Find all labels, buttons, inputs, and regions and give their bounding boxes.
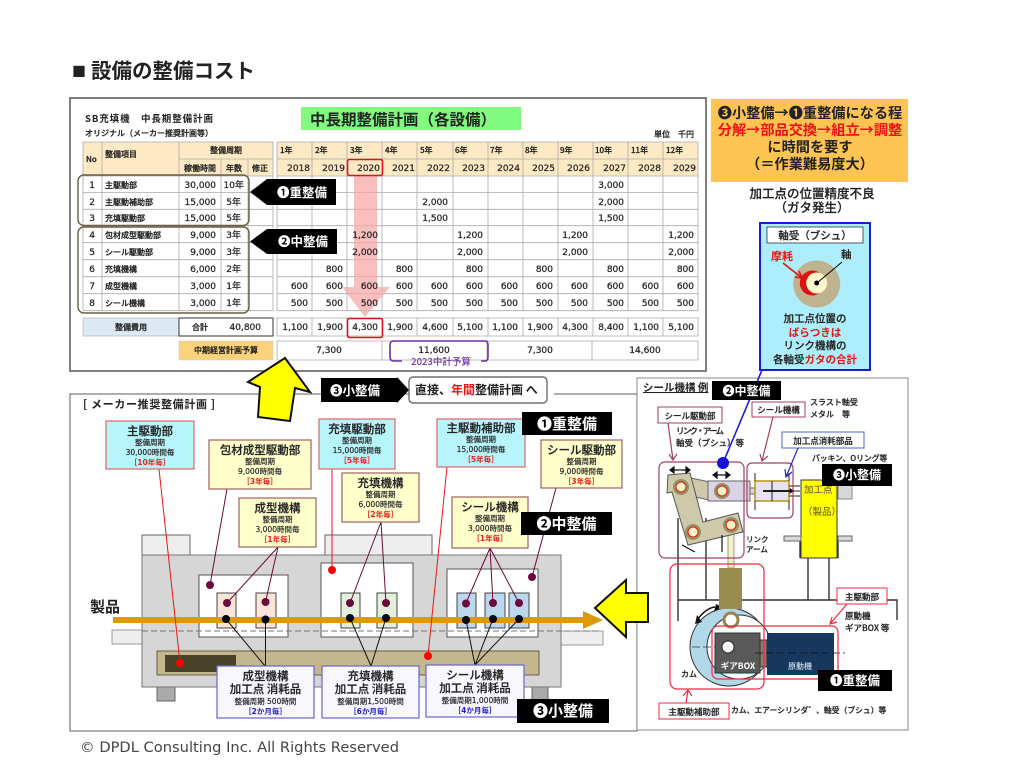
row labels: 主駆動補助部 xyxy=(105,197,153,208)
maintenance cost row: 8,400 xyxy=(598,323,624,333)
accuracy heading: （ガタ発生） xyxy=(774,197,850,216)
yearly cost values: 600 xyxy=(361,282,378,292)
yearly cost values: 800 xyxy=(326,265,343,275)
seal cylinder xyxy=(755,473,800,510)
yellow arrow up xyxy=(248,358,310,421)
table header: 整備周期 xyxy=(210,145,242,156)
label small maintenance xyxy=(822,464,892,486)
callout: packaging forming drive xyxy=(209,440,311,489)
maintenance cost row: 1,100 xyxy=(282,323,308,333)
table header: 12年 xyxy=(666,145,683,156)
table header: 修正 xyxy=(252,163,268,174)
yearly cost values: 1,200 xyxy=(668,231,694,241)
row labels: 1年 xyxy=(226,280,241,292)
label small maintenance: ❸小整備 xyxy=(833,466,881,483)
table header: 年数 xyxy=(226,163,242,174)
table subtitle: オリジナル（メーカー推奨計画等） xyxy=(85,128,213,139)
table header: 11年 xyxy=(631,145,648,156)
yearly cost values: 800 xyxy=(607,265,624,275)
yearly cost values: 3,000 xyxy=(598,181,624,191)
callout: main drive: 整備周期 xyxy=(135,437,165,447)
table header: 2020 xyxy=(357,164,380,174)
yearly cost values: 1,200 xyxy=(457,231,483,241)
row labels: シール機構 xyxy=(105,298,145,309)
row labels: 15,000 xyxy=(184,214,216,224)
yearly cost values: 2,000 xyxy=(562,248,588,258)
consumables box: filling: 加工点 消耗品 xyxy=(335,681,406,697)
row labels: 主駆動部 xyxy=(105,180,137,191)
label small maintenance to annual plan: ❸小整備 xyxy=(330,380,381,399)
yearly cost values: 2,000 xyxy=(598,198,624,208)
tag: main drive auxiliary: 主駆動補助部 xyxy=(668,706,720,718)
arrow label medium maintenance: ❷中整備 xyxy=(278,231,328,250)
footer copyright: © DPDL Consulting Inc. All Rights Reserved xyxy=(80,740,399,756)
text: motor gearbox: ギアBOX 等 xyxy=(845,622,890,634)
callout: seal mechanism: 整備周期 xyxy=(475,513,505,523)
link arm xyxy=(667,473,755,545)
callout: packaging forming drive: 包材成型駆動部 xyxy=(220,442,301,458)
callout: main drive auxiliary: 整備周期 xyxy=(466,434,496,444)
table header xyxy=(83,142,698,176)
purple bracket 2023 budget xyxy=(390,341,488,368)
table header: 2018 xyxy=(287,164,310,174)
yearly cost values: 500 xyxy=(642,299,659,309)
panel: work difficulty note: に時間を要す xyxy=(767,137,853,157)
maintenance points xyxy=(176,566,536,667)
panel: bearing detail: 加工点位置の xyxy=(784,311,846,326)
maintenance cost row: 40,800 xyxy=(230,323,261,333)
table header: 2022 xyxy=(427,164,450,174)
table header: 7年 xyxy=(490,145,503,156)
callout: seal mechanism xyxy=(452,497,528,548)
maintenance cost row: 1,900 xyxy=(387,323,413,333)
panel: work difficulty note: ❸小整備→❶重整備になる程 xyxy=(718,103,902,123)
tag: consumable parts: 加工点消耗部品 xyxy=(793,435,853,447)
yearly cost values: 800 xyxy=(396,265,413,275)
row labels: 30,000 xyxy=(184,181,216,191)
callout: filling drive: 充填駆動部 xyxy=(328,421,386,437)
table header: 整備項目 xyxy=(105,149,137,160)
text: link arm bearing: リンク・アーム xyxy=(676,425,724,437)
table header: 2026 xyxy=(567,164,590,174)
yearly cost values: 500 xyxy=(396,299,413,309)
panel: bearing detail: 軸受（ブシュ） xyxy=(778,228,852,243)
panel: bearing detail: リンク機構の xyxy=(784,338,846,353)
label small maintenance: ❸小整備 xyxy=(533,700,593,721)
row labels: 5 xyxy=(89,248,95,258)
yearly cost values: 600 xyxy=(466,282,483,292)
yearly cost values: 1,500 xyxy=(598,214,624,224)
table header: 稼働時間 xyxy=(184,163,216,174)
row labels: 充填機構 xyxy=(105,264,137,275)
yearly cost values: 600 xyxy=(536,282,553,292)
table header: 1年 xyxy=(280,145,293,156)
consumables box: forming: 加工点 消耗品 xyxy=(230,681,301,697)
table header: 2025 xyxy=(532,164,555,174)
callout: packaging forming drive: ［3年毎］ xyxy=(242,476,278,486)
row labels: 3年 xyxy=(226,246,241,258)
row labels: 9,000 xyxy=(190,231,216,241)
table header: 6年 xyxy=(455,145,468,156)
consumables box: seal xyxy=(426,665,524,717)
callout: seal drive: シール駆動部 xyxy=(547,442,616,458)
consumables box: seal: 加工点 消耗品 xyxy=(439,680,511,696)
group outline main drive xyxy=(712,626,838,679)
maintenance cost row: 4,300 xyxy=(352,323,378,333)
yearly cost values: 1,200 xyxy=(562,231,588,241)
row labels: 1 xyxy=(89,181,95,191)
unit label: 単位 千円 xyxy=(654,129,694,140)
yearly cost values: 500 xyxy=(431,299,448,309)
cam xyxy=(690,604,780,686)
title: 設備の整備コスト xyxy=(91,54,255,84)
row labels xyxy=(89,179,244,309)
consumables box: filling: 整備周期1,500時間 xyxy=(337,696,404,706)
table header: 2024 xyxy=(497,164,520,174)
callout: packaging forming drive: 整備周期 xyxy=(245,456,275,466)
maintenance cost row: 1,900 xyxy=(527,323,553,333)
consumables box: filling: ［6か月毎］ xyxy=(349,706,392,716)
panel: work difficulty note: 分解→部品交換→組立→調整 xyxy=(718,120,902,140)
workpiece: 加工点 xyxy=(804,482,833,496)
callout: main drive: 30,000時間毎 xyxy=(126,447,175,457)
callout: filling mechanism: 6,000時間毎 xyxy=(359,499,403,509)
panel: bearing detail: 軸 xyxy=(841,247,852,262)
arrow label medium maintenance xyxy=(250,229,337,254)
link bushings xyxy=(674,480,738,538)
tag: seal drive xyxy=(658,407,722,423)
yearly cost values: 1,200 xyxy=(352,231,378,241)
yearly cost values: 500 xyxy=(466,299,483,309)
yearly cost values: 1,500 xyxy=(422,214,448,224)
yearly cost values: 2,000 xyxy=(668,248,694,258)
label heavy maintenance xyxy=(522,412,612,435)
tag: seal mechanism xyxy=(752,402,805,417)
callout: seal drive xyxy=(541,440,622,488)
table header: 2021 xyxy=(392,164,415,174)
yearly cost values: 600 xyxy=(396,282,413,292)
callout: filling drive: 整備周期 xyxy=(342,435,372,445)
yearly cost values: 800 xyxy=(466,265,483,275)
callout: main drive: 主駆動部 xyxy=(127,423,173,439)
yearly cost values: 600 xyxy=(291,282,308,292)
label heavy maintenance: ❶重整備 xyxy=(830,670,880,689)
panel: seal mechanism example xyxy=(637,370,908,730)
text: packing: パッキン、Oリング等 xyxy=(812,453,888,464)
blue connector from bearing detail xyxy=(717,370,762,469)
yearly cost values: 2,000 xyxy=(457,248,483,258)
yearly cost values: 2,000 xyxy=(422,198,448,208)
callout: forming mechanism: ［1年毎］ xyxy=(260,534,295,544)
maintenance cost row: 合計 xyxy=(192,322,208,333)
table header: 2019 xyxy=(322,164,345,174)
callout: filling mechanism: ［2年毎］ xyxy=(363,509,398,519)
yearly cost values: 600 xyxy=(571,282,588,292)
row labels: 15,000 xyxy=(184,198,216,208)
yearly cost values: 600 xyxy=(677,282,694,292)
row labels: 1年 xyxy=(226,297,241,309)
yearly cost values: 600 xyxy=(501,282,518,292)
row labels: 充填駆動部 xyxy=(105,213,145,224)
yearly cost values: 500 xyxy=(501,299,518,309)
group outline main drive auxiliary xyxy=(670,564,764,689)
maintenance cost row: 1,100 xyxy=(492,323,518,333)
text: link arm: リンク xyxy=(746,534,768,545)
consumables box: seal: シール機構 xyxy=(446,667,504,683)
maintenance cost row xyxy=(83,318,698,336)
arrow label heavy maintenance: ❶重整備 xyxy=(277,182,327,201)
purple bracket 2023 budget: 2023中計予算 xyxy=(411,354,471,368)
red highlight 2020 xyxy=(348,160,382,176)
maintenance cost row: 4,600 xyxy=(422,323,448,333)
tag: seal mechanism: シール機構 xyxy=(757,404,800,416)
callout: filling mechanism: 整備周期 xyxy=(366,489,396,499)
group outline seal drive xyxy=(659,462,744,558)
row labels: 7 xyxy=(89,282,95,292)
label heavy maintenance: ❶重整備 xyxy=(537,413,597,434)
table header: 4年 xyxy=(385,145,398,156)
callout: seal mechanism: シール機構 xyxy=(461,499,519,515)
callout: main drive auxiliary: 15,000時間毎 xyxy=(457,444,506,454)
yearly cost values: 2,000 xyxy=(352,248,378,258)
callout: seal mechanism: 3,000時間毎 xyxy=(468,523,512,533)
callout: seal drive: 9,000時間毎 xyxy=(560,466,604,476)
table header: 8年 xyxy=(525,145,538,156)
row labels: 3,000 xyxy=(190,299,216,309)
machine illustration xyxy=(112,535,603,701)
green heading: 中長期整備計画（各設備） xyxy=(310,108,496,130)
panel: bearing detail: ばらつきは xyxy=(789,325,842,340)
mid-term budget row xyxy=(179,341,698,360)
consumables box: forming: ［2か月毎］ xyxy=(244,706,287,716)
gearbox xyxy=(715,633,760,673)
yearly cost values: 800 xyxy=(536,265,553,275)
row labels: 2年 xyxy=(226,263,241,275)
row labels: シール駆動部 xyxy=(105,247,153,258)
workpiece: （製品） xyxy=(803,504,841,518)
yearly cost values: 500 xyxy=(326,299,343,309)
callout: packaging forming drive: 9,000時間毎 xyxy=(238,466,282,476)
workpiece xyxy=(784,480,852,558)
text: link arm: アーム xyxy=(746,544,768,555)
tag: main drive xyxy=(837,588,887,604)
gearbox: ギアBOX xyxy=(721,660,756,672)
label medium maintenance xyxy=(521,512,612,535)
maintenance cost row: 整備費用 xyxy=(115,322,147,333)
maintenance cost row: 5,100 xyxy=(668,323,694,333)
callout: forming mechanism: 3,000時間毎 xyxy=(256,524,300,534)
callout: main drive auxiliary xyxy=(437,419,525,467)
leader lines xyxy=(159,467,556,666)
mid-term budget row: 7,300 xyxy=(527,346,553,356)
callout: filling mechanism: 充填機構 xyxy=(358,475,404,491)
table header: 2029 xyxy=(673,164,696,174)
table header: 9年 xyxy=(560,145,573,156)
consumables box: forming xyxy=(217,666,314,718)
table header: 5年 xyxy=(420,145,433,156)
table header: 2027 xyxy=(603,164,626,174)
title: ■ xyxy=(72,62,86,82)
tag: seal drive: シール駆動部 xyxy=(664,410,716,422)
label medium maintenance xyxy=(712,381,781,400)
callout: main drive auxiliary: 主駆動補助部 xyxy=(446,420,516,436)
callout: forming mechanism: 成型機構 xyxy=(254,500,301,516)
consumables box: forming: 成型機構 xyxy=(242,668,289,684)
yearly cost values: 500 xyxy=(571,299,588,309)
panel: mid-long term maintenance plan table xyxy=(70,98,706,371)
text: link arm bearing: 軸受（ブシュ）等 xyxy=(676,437,745,449)
connecting rod xyxy=(719,532,742,627)
consumables box: seal: 整備周期1,000時間 xyxy=(442,695,508,705)
label heavy maintenance xyxy=(818,670,892,691)
pointer arrows xyxy=(668,417,847,703)
panel heading: [ メーカー推奨整備計画 ] xyxy=(83,396,215,412)
product conveyor arrow xyxy=(113,611,603,629)
row labels: 成型機構 xyxy=(105,281,137,292)
yellow arrow left xyxy=(595,580,648,637)
panel: bearing detail: 各軸受ガタの合計 xyxy=(773,352,857,367)
callout: seal mechanism: ［1年毎］ xyxy=(472,533,508,543)
text: thrust bearing: メタル 等 xyxy=(810,409,850,420)
callout: seal drive: ［3年毎］ xyxy=(564,476,599,486)
label medium maintenance: ❷中整備 xyxy=(536,513,597,534)
accuracy heading: 加工点の位置精度不良 xyxy=(749,183,875,202)
yearly cost values: 500 xyxy=(536,299,553,309)
row labels: 4 xyxy=(89,231,95,241)
label small maintenance to annual plan: 直接、年間整備計画 へ xyxy=(415,381,538,398)
yearly cost values: 500 xyxy=(607,299,624,309)
row labels: 6 xyxy=(89,265,95,275)
group outline medium maintenance xyxy=(78,227,249,313)
panel: bearing detail: 摩耗 xyxy=(771,248,793,264)
row labels: 3年 xyxy=(226,229,241,241)
row labels: 10年 xyxy=(224,179,244,191)
callout: main drive auxiliary: ［5年毎］ xyxy=(463,454,499,464)
table header: No xyxy=(86,154,97,165)
yearly cost values: 600 xyxy=(607,282,624,292)
text: thrust bearing: スラスト軸受 xyxy=(810,397,858,408)
panel heading: シール機構 例 xyxy=(643,380,708,395)
tag: main drive: 主駆動部 xyxy=(845,591,879,603)
coupling xyxy=(760,640,767,667)
callout: seal drive: 整備周期 xyxy=(566,456,596,466)
icon: bearing xyxy=(783,260,842,308)
panel: maker recommended plan xyxy=(70,385,637,731)
group outline seal mechanism xyxy=(747,463,793,518)
row labels: 8 xyxy=(89,299,95,309)
row labels: 5年 xyxy=(226,196,241,208)
mid-term budget row: 中期経営計画予算 xyxy=(194,345,258,356)
motion arrows xyxy=(670,467,793,552)
frame and machine rails xyxy=(678,518,897,621)
label small maintenance xyxy=(517,699,609,723)
yearly cost values: 600 xyxy=(642,282,659,292)
text: motor gearbox: 原動機 xyxy=(845,610,871,622)
label medium maintenance: ❷中整備 xyxy=(722,382,771,399)
motor: 原動機 xyxy=(788,661,812,672)
table header: 2028 xyxy=(638,164,661,174)
arrow label heavy maintenance xyxy=(250,179,336,205)
table title: SB充填機 中長期整備計画 xyxy=(85,111,213,125)
label small maintenance to annual plan xyxy=(321,377,547,403)
accuracy heading xyxy=(749,183,875,216)
yearly cost values: 600 xyxy=(326,282,343,292)
motor xyxy=(755,633,845,675)
tag: consumable parts xyxy=(782,432,864,448)
consumables box: filling xyxy=(322,666,419,718)
callout: filling drive: ［5年毎］ xyxy=(339,455,375,465)
callout: forming mechanism: 整備周期 xyxy=(262,514,292,524)
red highlight 4300 xyxy=(348,318,382,338)
yearly cost values: 600 xyxy=(431,282,448,292)
panel: bearing detail xyxy=(760,223,870,370)
table grid xyxy=(83,176,698,311)
text: cam: カム xyxy=(681,669,697,680)
yearly cost values xyxy=(291,181,694,309)
text: cam parts: カム、エアーシリンダ゛、軸受（ブシュ）等 xyxy=(731,705,887,716)
callout: main drive xyxy=(106,421,194,469)
mid-term budget row: 7,300 xyxy=(316,346,342,356)
group outline heavy maintenance xyxy=(78,175,249,226)
panel: work difficulty note: （＝作業難易度大） xyxy=(746,154,874,174)
maintenance cost row: 1,100 xyxy=(633,323,659,333)
yearly cost values: 500 xyxy=(291,299,308,309)
table header: 10年 xyxy=(595,145,612,156)
row labels: 3 xyxy=(89,214,95,224)
row labels: 2 xyxy=(89,198,95,208)
tag: main drive auxiliary xyxy=(659,703,729,719)
callout: filling mechanism xyxy=(342,473,419,522)
maintenance cost row: 1,900 xyxy=(317,323,343,333)
row labels: 6,000 xyxy=(190,265,216,275)
maintenance cost row: 4,300 xyxy=(562,323,588,333)
callout: forming mechanism xyxy=(239,498,316,547)
callout: filling drive: 15,000時間毎 xyxy=(333,445,382,455)
panel: work difficulty note xyxy=(711,99,908,182)
product label: 製品 xyxy=(90,596,120,617)
yearly cost values: 500 xyxy=(361,299,378,309)
mid-term budget row: 14,600 xyxy=(629,346,661,356)
consumables box: forming: 整備周期 500時間 xyxy=(235,696,296,706)
row labels: 9,000 xyxy=(190,248,216,258)
table header: 2023 xyxy=(462,164,485,174)
callout: main drive: ［10年毎］ xyxy=(130,457,170,467)
callout: filling drive xyxy=(319,419,395,469)
maintenance cost row: 5,100 xyxy=(457,323,483,333)
yearly cost values: 800 xyxy=(677,265,694,275)
table header: 2年 xyxy=(315,145,328,156)
consumables box: seal: ［4か月毎］ xyxy=(454,705,496,715)
pink arrow 2020 xyxy=(342,176,390,317)
table header: 3年 xyxy=(350,145,363,156)
consumables box: filling: 充填機構 xyxy=(348,668,394,684)
row labels: 包材成型駆動部 xyxy=(105,230,161,241)
mid-term budget row: 11,600 xyxy=(418,346,450,356)
row labels: 3,000 xyxy=(190,282,216,292)
row labels: 5年 xyxy=(226,212,241,224)
yearly cost values: 500 xyxy=(677,299,694,309)
